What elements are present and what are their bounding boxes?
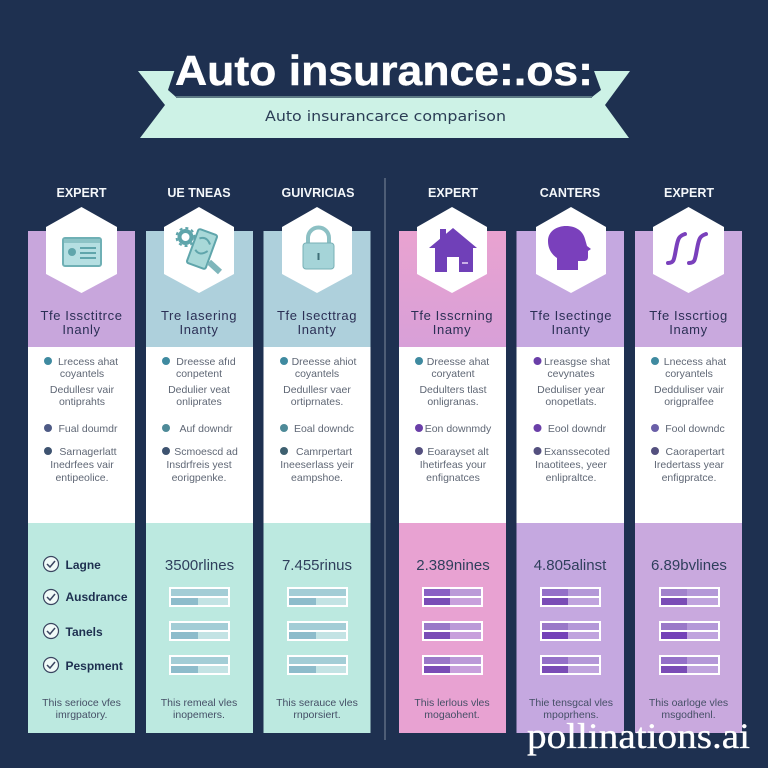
panel title: Inanty [297,322,337,337]
footer note: This serioce vfes [42,697,121,709]
body text: entipeolice. [55,472,109,484]
body panel [635,347,742,523]
body text: Eon downmdy [425,423,492,435]
column heading: EXPERT [56,186,107,200]
body text: coyantels [60,368,104,380]
body text: Fool downdc [665,423,725,435]
header panel [264,231,370,347]
body text: Dedullesr vair [50,384,115,396]
body text: conpetent [176,368,222,380]
body text: Dreesse afıd [176,356,236,368]
body text: Dedulters tlast [419,384,487,396]
body panel [399,347,506,523]
body text: enlipraltce. [546,472,596,484]
title banner [138,47,630,138]
panel title: Inamy [669,322,708,337]
subtitle: Auto insurancarce comparison [265,109,506,125]
bar chart [169,587,230,675]
title: Auto insurance:.os: [175,47,593,94]
column heading: EXPERT [428,186,478,200]
footer note: inopemers. [173,709,225,721]
body text: Exanssecoted [544,446,610,458]
body text: Eoal downdc [294,423,354,435]
footer note: This lerlous vles [414,697,490,709]
column 1: expert [28,186,135,733]
footer panel [28,523,135,733]
body text: Ihetirfeas your [420,459,487,471]
body panel [516,347,624,523]
panel title: Inanly [62,322,101,337]
body panel [146,347,253,523]
watermark: pollinations.ai [527,716,750,756]
panel title: Inamy [433,322,471,337]
body text: Fual doumdr [59,423,118,435]
column heading: CANTERS [540,186,600,200]
body text: onliprates [176,396,222,408]
column heading: GUIVRICIAS [282,186,354,200]
body text: coryantels [665,368,713,380]
icon: head [536,207,606,293]
body text: Deduliser year [537,384,605,396]
icon: id card [46,207,117,293]
body text: cevynates [547,368,595,380]
body text: Lreasgse shat [544,356,610,368]
bar chart [287,587,348,675]
footer note: mogaohent. [424,709,480,721]
panel title: Inanty [551,322,591,337]
body text: Dreesse ahat [427,356,489,368]
column 4: expert [399,186,506,733]
panel title: Tfe Isscrtiog [649,308,728,323]
checklist [44,556,128,673]
panel title: Tfe Issctitrce [40,308,123,323]
body text: Ineeserlass yeir [280,459,354,471]
body text: Dedduliser vair [654,384,725,396]
body text: coyantels [295,368,339,380]
bar chart [422,587,483,675]
center divider [384,178,386,740]
body text: Sarnagerlatt [59,446,117,458]
column heading: UE TNEAS [167,186,231,200]
body text [651,356,726,484]
body text: Eoarayset alt [427,446,489,458]
footer note: imrgpatory. [56,709,107,721]
header panel [146,231,253,347]
body panel [264,347,370,523]
footer panel [635,523,742,733]
stat: 6.89bvlines [651,557,727,574]
body text: Caorapertart [666,446,725,458]
panel title: Tfe Isscrning [411,308,493,323]
checklist: Lagne [66,558,101,572]
body text: coryatent [431,368,475,380]
stat: 2.389nines [416,557,490,574]
body text [44,356,118,484]
body text: eampshoe. [291,472,343,484]
body text: ontiprahts [59,396,105,408]
column 2: ue tneas [146,186,253,733]
body text: eorigpenke. [172,472,226,484]
stat: 4.805alinst [534,557,607,574]
panel title: Tre Iasering [161,308,237,323]
footer note: Thie tensgcal vles [529,697,613,709]
body text: Auf downdr [179,423,233,435]
panel title: Inanty [179,322,219,337]
footer note: msgodhenl. [661,709,716,721]
body text [415,356,492,484]
icon: gear and tool [164,207,234,293]
body text: origpralfee [664,396,714,408]
header panel [399,231,506,347]
footer note: This remeal vles [161,697,237,709]
body text: Dedullesr vaer [283,384,351,396]
icon: house [417,207,487,293]
stat: 3500rlines [165,557,234,574]
bar chart [659,587,720,675]
icon: double curves [653,207,724,293]
panel title: Tfe Isectinge [530,308,612,323]
body text: Camrpertart [296,446,352,458]
body text: onopetlats. [545,396,597,408]
body text [280,356,356,484]
body text: enfigpratce. [662,472,716,484]
column heading: EXPERT [664,186,714,200]
panel title: Tfe Isecttrag [277,308,357,323]
body text: enfignatces [426,472,480,484]
checklist: Ausdrance [66,590,128,604]
footer panel [146,523,253,733]
body text: Lnecess ahat [664,356,726,368]
stat: 7.455rinus [282,557,352,574]
footer note: This serauce vles [276,697,358,709]
header panel [516,231,624,347]
column 6: expert [635,186,742,733]
body text [162,356,238,484]
body text: Scmoescd ad [174,446,238,458]
body text: onligranas. [427,396,479,408]
footer note: rnporsiert. [293,709,341,721]
checklist: Tanels [66,625,103,639]
body text: Inaotitees, yeer [535,459,607,471]
column 5: canters [516,186,624,733]
body text: Lrecess ahat [58,356,118,368]
bar chart [540,587,601,675]
body text: Dreesse ahiot [292,356,356,368]
header panel [635,231,742,347]
body panel [28,347,135,523]
icon: padlock [282,207,352,293]
body text: Eool downdr [548,423,607,435]
footer panel [516,523,624,733]
body text [534,356,610,484]
footer panel [399,523,506,733]
body text: Insdrfreis yest [166,459,232,471]
footer panel [264,523,370,733]
header panel [28,231,135,347]
body text: Inedrfees vair [50,459,114,471]
body text: ortiprnates. [291,396,343,408]
column 3: guivricias [264,186,370,733]
body text: Iredertass year [654,459,725,471]
checklist: Pespment [66,659,123,673]
footer note: This oarloge vles [649,697,728,709]
footer note: mpoprhens. [543,709,599,721]
body text: Dedulier veat [168,384,230,396]
